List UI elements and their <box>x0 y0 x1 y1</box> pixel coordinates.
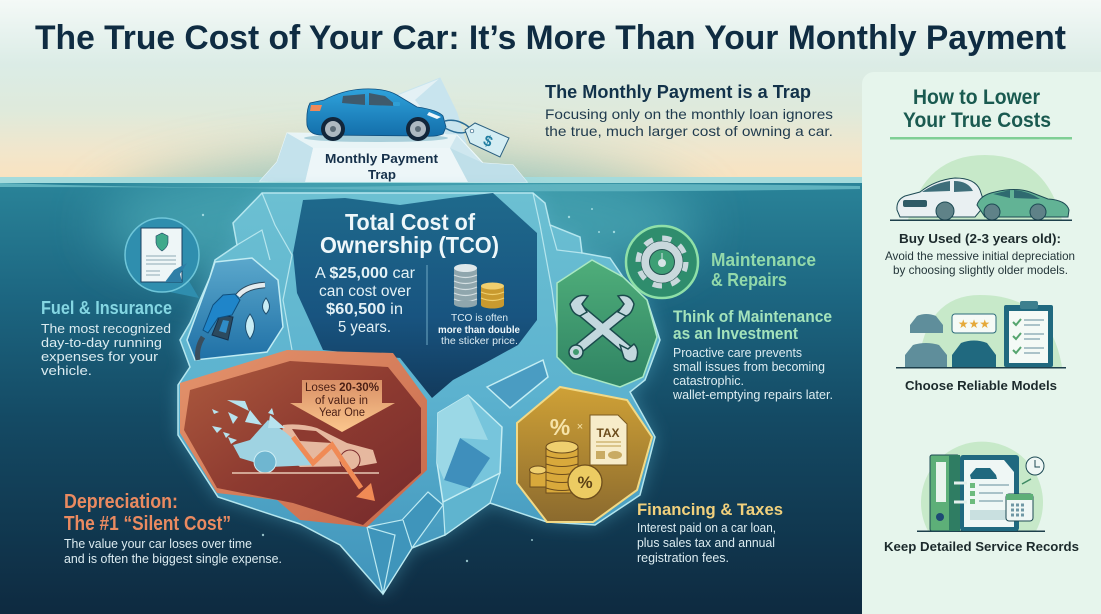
TCO example: $60,500 in <box>326 301 403 318</box>
label: monthly payment trap <box>325 151 439 182</box>
financing text: registration fees. <box>637 551 729 565</box>
maintenance investment text: wallet-emptying repairs later. <box>672 388 833 402</box>
panel: how to lower your true costs <box>862 72 1101 614</box>
maintenance investment text: as an Investment <box>673 324 798 343</box>
icon: tax document and coins <box>530 414 627 499</box>
icon: tax document and coins: TAX <box>596 426 620 440</box>
fuel and insurance text: The most recognized <box>41 322 171 336</box>
price tag <box>445 120 509 157</box>
icon: tax document and coins: % <box>550 414 570 440</box>
panel heading: Your True Costs <box>903 109 1051 132</box>
secondary crystal <box>487 360 548 408</box>
icon: shattering car <box>212 400 379 501</box>
panel heading: How to Lower <box>913 86 1040 109</box>
TCO note: the sticker price. <box>441 335 518 347</box>
financing text: Interest paid on a car loan, <box>637 521 776 535</box>
title: The True Cost of Your Car: It’s More Than Your Monthly Payment <box>35 19 1066 57</box>
financing text <box>637 500 783 565</box>
tip: choose reliable models: Choose Reliable Models <box>905 378 1057 393</box>
maintenance heading <box>711 250 816 290</box>
financing text: plus sales tax and annual <box>637 536 775 550</box>
icon: cars with ratings and checklist: ★★★ <box>958 317 990 331</box>
TCO note: TCO is often <box>451 312 508 324</box>
icon: cars with ratings and checklist <box>896 295 1066 368</box>
financing text: Financing & Taxes <box>637 500 783 519</box>
TCO heading: Total Cost of <box>345 209 475 235</box>
depreciation text: The #1 “Silent Cost” <box>64 513 231 535</box>
fuel and insurance text: vehicle. <box>41 364 92 378</box>
TCO heading <box>320 209 499 258</box>
fuel and insurance text: day-to-day running <box>41 336 162 350</box>
maintenance heading: Maintenance <box>711 250 816 270</box>
submerged iceberg <box>178 193 660 594</box>
callout: value loss arrow: of value in <box>315 395 368 407</box>
panel heading <box>890 86 1072 140</box>
icon: tax document and coins: % <box>577 473 593 492</box>
trap explanation text: Focusing only on the monthly loan ignores <box>545 106 833 122</box>
callout: value loss arrow: Year One <box>319 407 365 419</box>
TCO note <box>438 312 520 347</box>
fuel and insurance text: expenses for your <box>41 350 158 364</box>
icon: binder with documents <box>917 442 1045 532</box>
TCO note: more than double <box>438 324 520 336</box>
tip: buy used: Avoid the messive initial depreciation <box>885 249 1075 263</box>
blue car <box>304 89 448 142</box>
panel: depreciation chunk <box>180 350 427 527</box>
iceberg tip with car <box>260 78 527 182</box>
maintenance investment text: catastrophic. <box>673 374 744 388</box>
icon: crossed wrenches <box>569 295 638 362</box>
price tag: $ <box>481 132 495 151</box>
depreciation text: Depreciation: <box>64 491 178 513</box>
fuel and insurance text <box>41 298 172 378</box>
trap explanation text <box>545 82 833 139</box>
TCO example: can cost over <box>319 283 411 300</box>
icon: fuel pump nozzle <box>198 285 270 360</box>
trap explanation text: the true, much larger cost of owning a car. <box>545 123 833 139</box>
label: monthly payment trap: Monthly Payment <box>325 151 439 166</box>
TCO example: 5 years. <box>338 319 391 336</box>
tip: keep service records: Keep Detailed Service Records <box>884 539 1079 554</box>
panel: maintenance chunk <box>557 260 657 387</box>
TCO example <box>315 265 415 336</box>
icon: gear bubble <box>626 226 698 298</box>
tip: buy used: Buy Used (2-3 years old): <box>899 231 1061 246</box>
maintenance investment text: small issues from becoming <box>673 360 825 374</box>
upper ice facets <box>237 193 582 350</box>
icon: used cars <box>890 155 1072 221</box>
bottom ice facets <box>367 473 500 594</box>
TCO heading: Ownership (TCO) <box>320 232 499 258</box>
maintenance investment text: Proactive care prevents <box>673 346 802 360</box>
central ice crystal <box>437 395 502 502</box>
icon: insurance document bubble <box>125 218 199 298</box>
icon: coin stacks <box>454 264 504 308</box>
tip: choose reliable models <box>896 295 1066 393</box>
panel: fuel chunk <box>187 258 283 360</box>
callout: value loss arrow: Loses 20-30% <box>305 382 379 394</box>
maintenance heading: & Repairs <box>711 270 787 290</box>
depreciation text: The value your car loses over time <box>64 537 252 551</box>
maintenance investment text <box>672 307 833 402</box>
callout: value loss arrow <box>290 380 395 432</box>
depreciation text <box>64 491 282 566</box>
label: monthly payment trap: Trap <box>368 167 396 182</box>
icon: tax document and coins: × <box>577 421 583 433</box>
depreciation text: and is often the biggest single expense. <box>64 552 282 566</box>
fuel and insurance text: Fuel & Insurance <box>41 298 172 318</box>
tip: keep service records <box>884 442 1079 554</box>
trap explanation text: The Monthly Payment is a Trap <box>545 82 811 102</box>
panel: total cost of ownership <box>293 193 537 398</box>
TCO example: A $25,000 car <box>315 265 415 282</box>
panel: financing chunk <box>517 387 652 522</box>
iceberg above water <box>260 78 527 182</box>
tip: buy used: by choosing slightly older models. <box>893 263 1068 277</box>
maintenance investment text: Think of Maintenance <box>673 307 832 326</box>
tip: buy used <box>885 155 1075 277</box>
